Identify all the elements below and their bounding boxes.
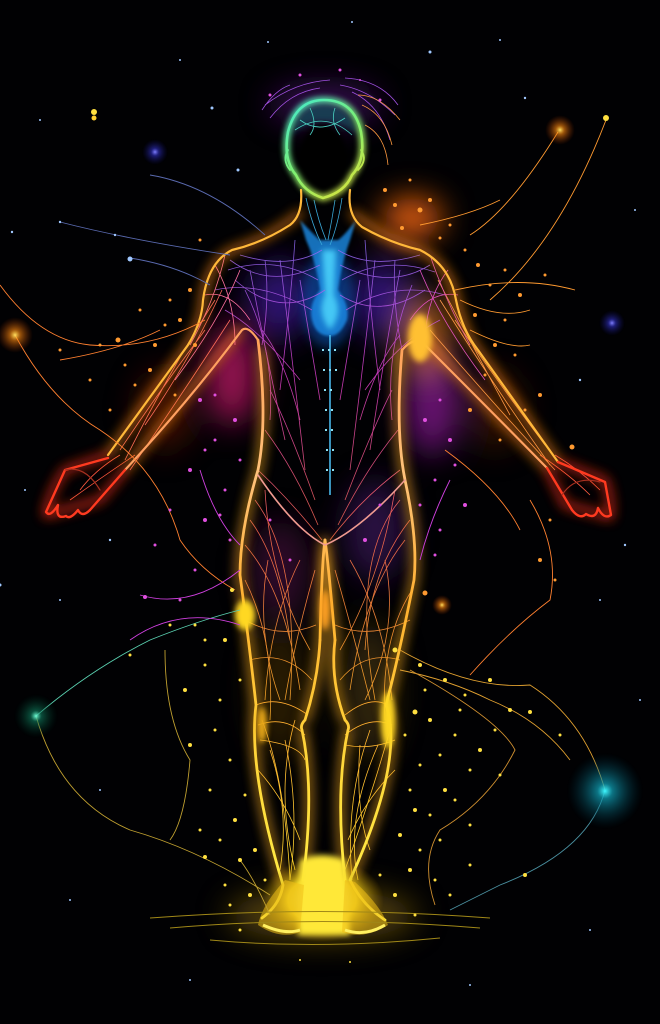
distant nodes (0, 109, 643, 829)
neck and shoulders (108, 190, 558, 462)
glow: feet (150, 855, 490, 945)
body outline glow (46, 100, 611, 920)
nerve network: knees and calves (256, 702, 395, 880)
nerve network: chest and abdomen (215, 240, 445, 525)
right hand (547, 462, 611, 516)
head fibres and hair wisps (262, 78, 400, 245)
nerve network: hips and thighs (245, 470, 412, 720)
head interior colour (292, 104, 358, 196)
glow: knee and thigh highlights (235, 314, 432, 748)
torso and right leg (325, 350, 415, 920)
head outline (285, 100, 364, 198)
left hand (46, 458, 125, 517)
inner arms (125, 329, 547, 470)
pelvis line (258, 475, 405, 545)
torso and left leg (240, 340, 325, 918)
glowing chest and spine (300, 220, 356, 495)
nerve network: arms (70, 255, 600, 500)
particles: pink and violet (143, 68, 467, 602)
particles: yellow lower (128, 588, 562, 963)
particles: warm upper (58, 178, 574, 596)
ambient colour glow behind figure (137, 87, 523, 940)
external nerve fibres (0, 120, 606, 915)
